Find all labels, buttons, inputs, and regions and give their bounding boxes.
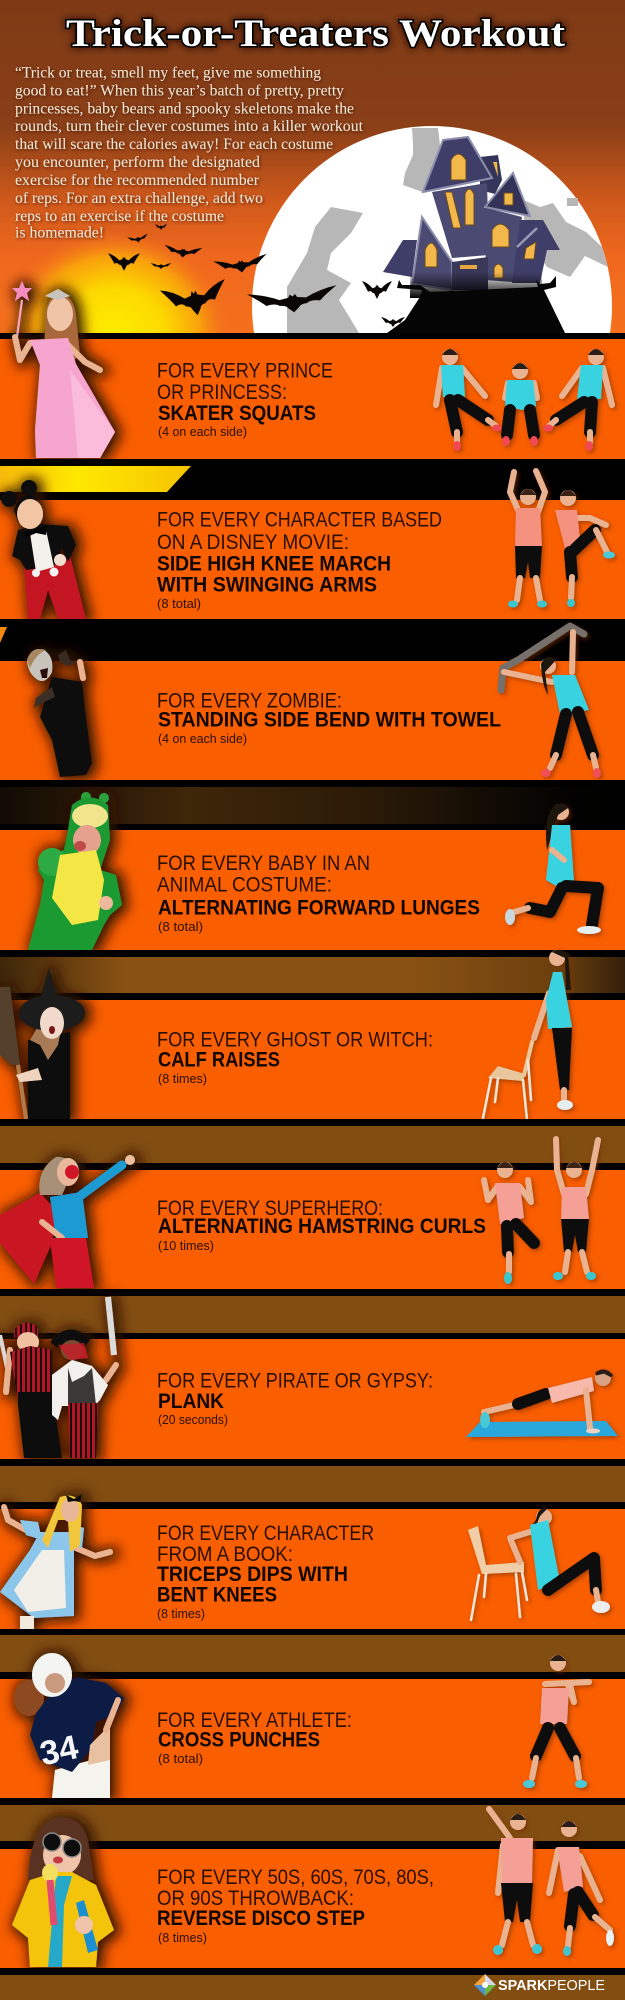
intro paragraph: rounds, turn their clever costumes into a killer workout [15, 118, 364, 135]
text: ghost or witch: (8 times) [158, 1072, 207, 1086]
text: superhero: FOR EVERY SUPERHERO: [157, 1196, 383, 1220]
text: character from a book: TRICEPS DIPS WITH [157, 1563, 348, 1586]
panel: header background [0, 0, 625, 440]
text: athlete: (8 total) [158, 1752, 203, 1766]
text: character from a book [157, 1521, 374, 1621]
text: pirate or gypsy: PLANK [158, 1390, 224, 1413]
illustration: haunted house [383, 137, 565, 333]
exerciser: triceps dips with chair [468, 1508, 610, 1620]
text: decade throwback: FOR EVERY 50S, 60S, 70S, 80S, [157, 1865, 434, 1889]
text: character from a book: BENT KNEES [157, 1584, 277, 1607]
text: pirate or gypsy: FOR EVERY PIRATE OR GYPSY: [157, 1369, 433, 1393]
text: character from a book: FROM A BOOK: [157, 1542, 293, 1566]
text: decade throwback: OR 90S THROWBACK: [157, 1886, 354, 1910]
text: zombie [157, 689, 501, 746]
text: disney character [157, 508, 442, 611]
text: zombie: (4 on each side) [158, 732, 247, 746]
panel: ghost or witch [0, 950, 625, 1120]
panel: prince or princess [0, 281, 625, 459]
text: ghost or witch: CALF RAISES [158, 1049, 280, 1072]
text: disney character: SIDE HIGH KNEE MARCH [157, 553, 391, 576]
text: superhero: ALTERNATING HAMSTRING CURLS [158, 1215, 486, 1238]
child: alice costume [0, 1494, 110, 1629]
text: prince or princess: (4 on each side) [158, 425, 247, 439]
text: zombie: FOR EVERY ZOMBIE: [157, 689, 342, 713]
panel: character from a book [0, 1459, 625, 1629]
illustration: full moon with clouds [252, 126, 612, 486]
text: disney character: FOR EVERY CHARACTER BASED [157, 508, 442, 532]
icon: sparkpeople star [474, 1974, 496, 1996]
panel: decade throwback [0, 1798, 625, 1968]
panel: superhero [0, 1119, 625, 1289]
text: baby animal costume: (8 total) [158, 920, 203, 934]
intro paragraph: that will scare the calories away! For each costume [15, 136, 333, 153]
text: pirate or gypsy [157, 1369, 433, 1427]
text: athlete [157, 1708, 352, 1766]
intro paragraph: is homemade! [15, 225, 104, 242]
panel: baby animal costume [0, 780, 625, 950]
exerciser: skater squats [436, 349, 612, 451]
intro paragraph: of reps. For an extra challenge, add two [15, 190, 263, 207]
child: retro sunglasses with microphone [12, 1817, 114, 1967]
logo wordmark: SPARKPEOPLE [498, 1977, 605, 1994]
child: frog costume [28, 792, 122, 950]
text: ghost or witch [157, 1028, 433, 1086]
intro paragraph: good to eat!” When this year’s batch of pretty, pretty [15, 83, 344, 100]
text: pirate or gypsy: (20 seconds) [158, 1413, 228, 1427]
intro paragraph: reps to an exercise if the costume [15, 208, 224, 225]
panel: disney character [0, 459, 625, 619]
text: prince or princess: OR PRINCESS: [157, 380, 287, 404]
text: prince or princess [157, 358, 333, 439]
text: decade throwback: REVERSE DISCO STEP [157, 1907, 365, 1930]
panel: athlete [0, 1629, 625, 1798]
text: baby animal costume: ANIMAL COSTUME: [157, 873, 332, 897]
intro paragraph: you encounter, perform the designated [15, 154, 260, 171]
exerciser: cross punches [523, 1655, 589, 1788]
child: witch [0, 968, 85, 1119]
exerciser: calf raises with chair [483, 950, 573, 1120]
intro paragraph: princesses, baby bears and spooky skeletons make the [15, 100, 354, 117]
child: football player [14, 1653, 124, 1798]
sun glow [0, 230, 230, 440]
exerciser: forward lunges [505, 804, 601, 934]
text: decade throwback [157, 1865, 434, 1945]
text: character from a book: (8 times) [157, 1607, 205, 1621]
text: athlete: CROSS PUNCHES [158, 1729, 320, 1752]
text: baby animal costume: FOR EVERY BABY IN AN [157, 851, 370, 875]
jersey number: 34 [37, 1728, 82, 1773]
intro paragraph [15, 64, 364, 242]
black hill and fence [387, 276, 565, 333]
bats [108, 224, 405, 327]
child: princess [12, 281, 115, 458]
exerciser: reverse disco step [489, 1809, 614, 1956]
exerciser: plank on mat [466, 1370, 618, 1437]
intro paragraph: exercise for the recommended number [15, 172, 260, 189]
child: zombie [27, 649, 92, 777]
intro paragraph: “Trick or treat, smell my feet, give me something [15, 64, 321, 81]
exerciser: side high knee march [508, 471, 615, 608]
text: prince or princess: FOR EVERY PRINCE [157, 358, 333, 382]
text: baby animal costume [157, 851, 480, 934]
text: disney character: (8 total) [157, 597, 201, 611]
footer band with logo [0, 1968, 625, 2000]
text: character from a book: FOR EVERY CHARACTER [157, 1521, 374, 1545]
text: disney character: WITH SWINGING ARMS [157, 574, 377, 597]
panel: pirate or gypsy [0, 1289, 625, 1459]
child: mickey costume [1, 480, 86, 619]
child: pirates [0, 1297, 116, 1458]
text: superhero: (10 times) [158, 1239, 214, 1253]
text: superhero [157, 1196, 486, 1253]
text: athlete: FOR EVERY ATHLETE: [157, 1708, 352, 1732]
exerciser: side bend with towel [501, 626, 601, 778]
text: decade throwback: (8 times) [158, 1931, 207, 1945]
child: superhero [0, 1155, 135, 1288]
panel: zombie [0, 619, 625, 780]
text: baby animal costume: ALTERNATING FORWARD LUNGES [158, 897, 480, 920]
title: Trick-or-Treaters Workout [66, 12, 565, 55]
text: zombie: STANDING SIDE BEND WITH TOWEL [158, 709, 501, 732]
text: ghost or witch: FOR EVERY GHOST OR WITCH: [157, 1028, 433, 1052]
exerciser: hamstring curls [484, 1139, 598, 1284]
text: disney character: ON A DISNEY MOVIE: [157, 530, 349, 554]
text: prince or princess: SKATER SQUATS [158, 402, 316, 425]
